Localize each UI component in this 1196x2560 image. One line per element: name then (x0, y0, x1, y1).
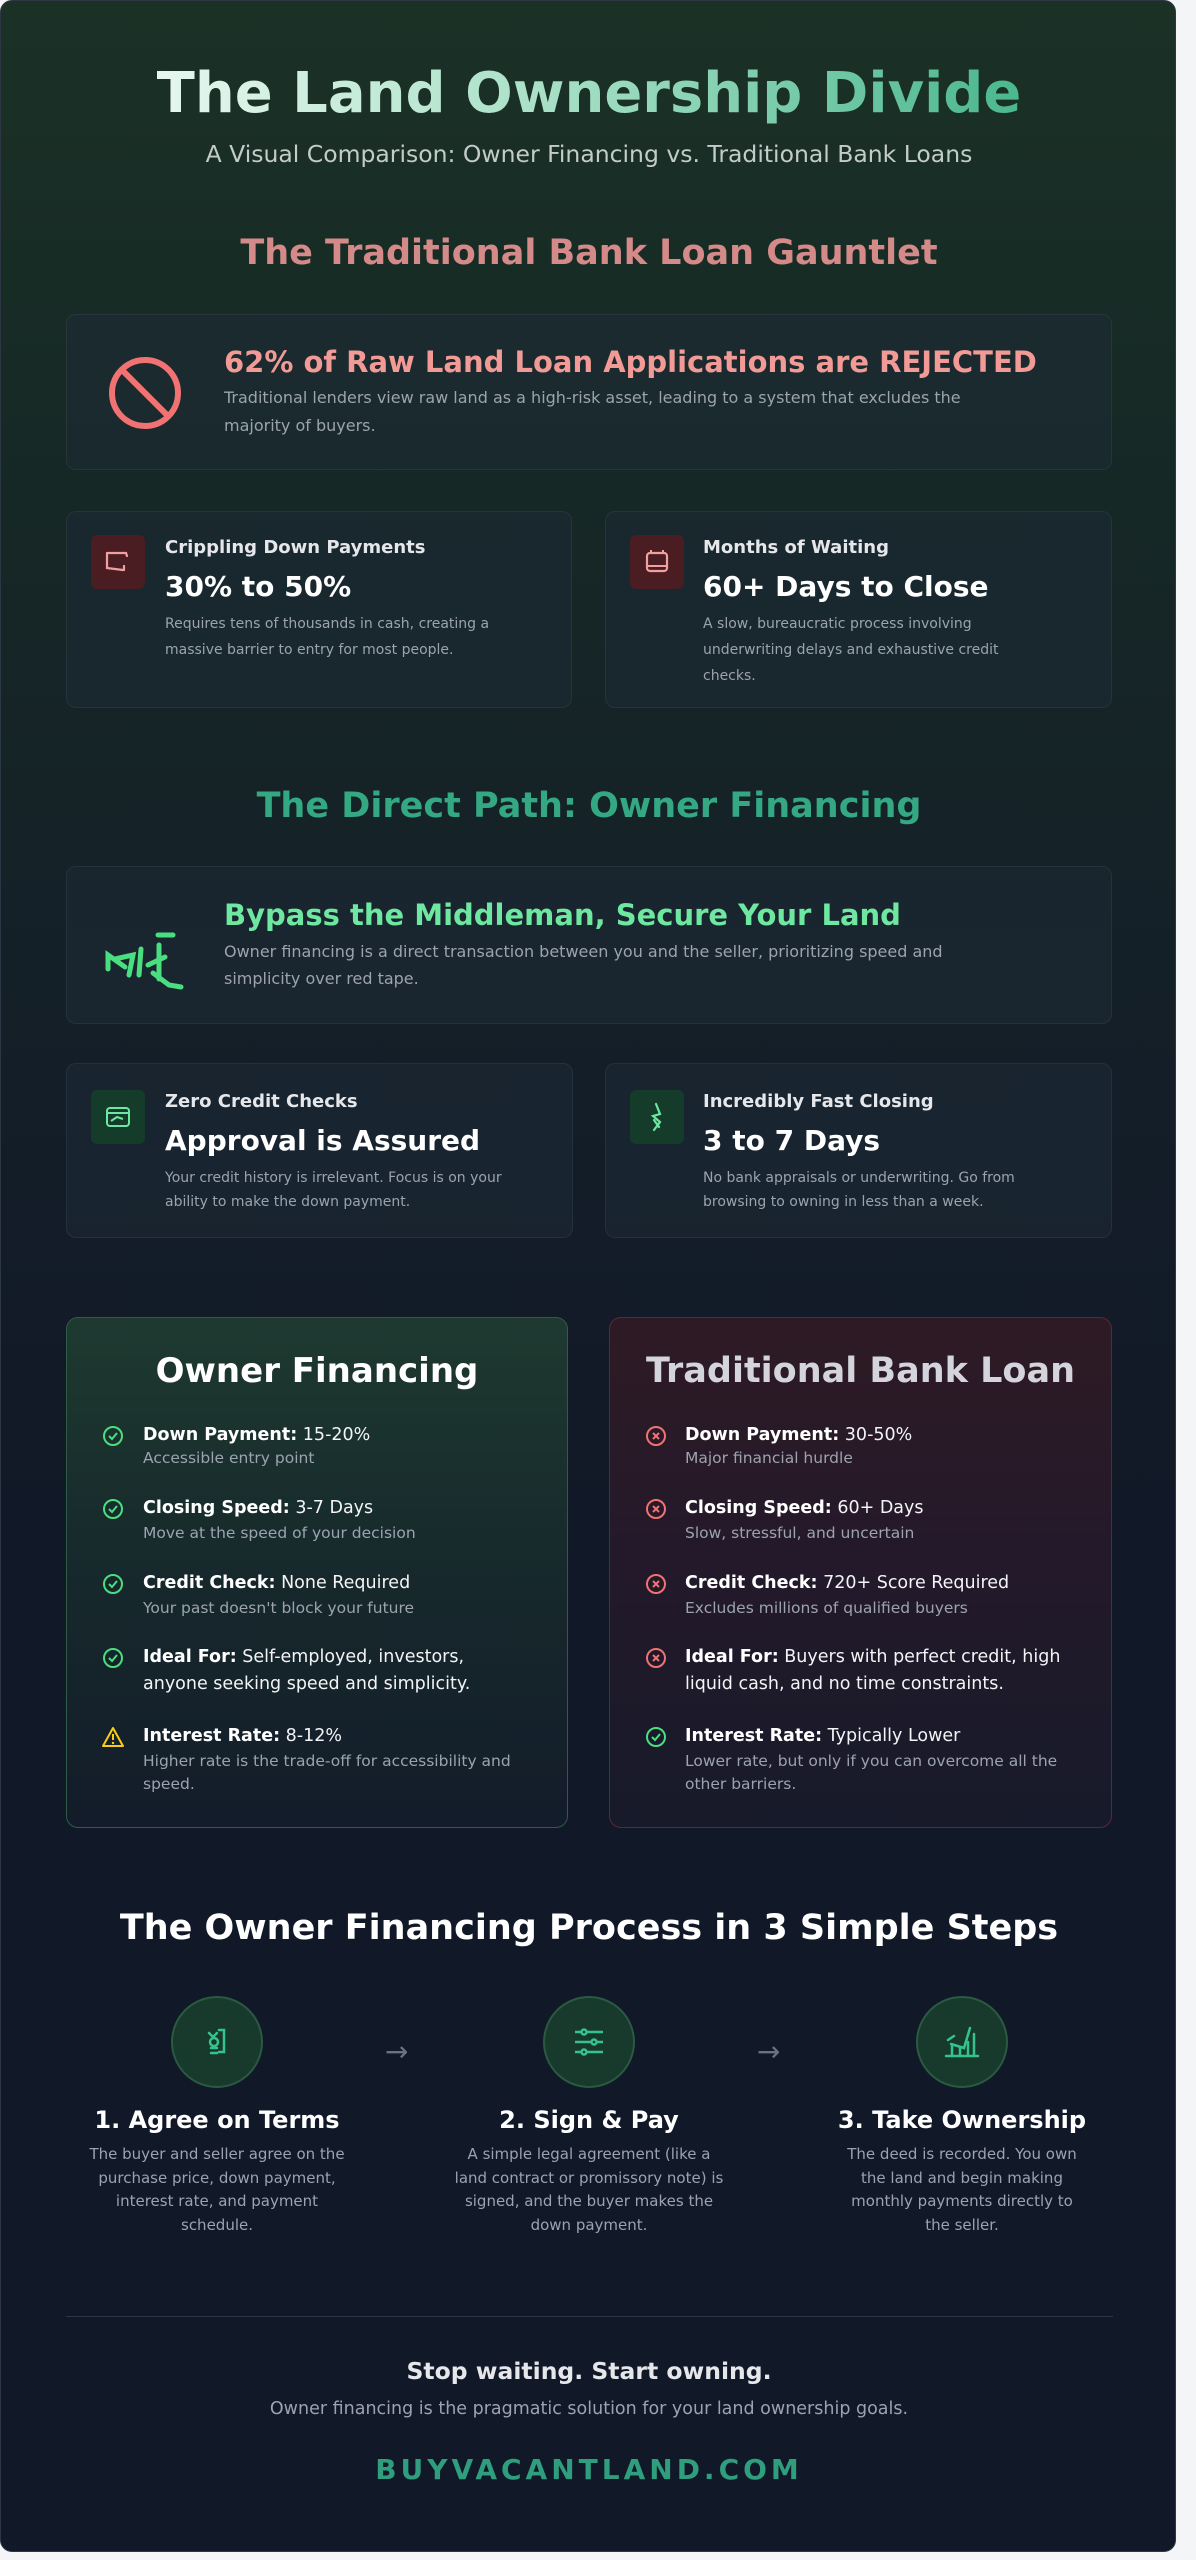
step 2: 2. Sign & Pay (499, 2106, 679, 2134)
step 1: 1. Agree on Terms (94, 2106, 340, 2134)
item: interest rate (646, 1726, 1057, 1793)
icon: wallet (91, 535, 145, 589)
panel: owner financing comparison: Ideal For: Self-employed, investors, anyone seeking speed and simplicity. (143, 1647, 470, 1694)
item: closing speed (103, 1498, 416, 1542)
icon: growth chart circle (916, 1996, 1008, 2088)
panel: bypass the middleman (66, 866, 1112, 1024)
panel: bank loan comparison (609, 1317, 1112, 1828)
panel: down payments (66, 511, 572, 708)
panel: down payments: Requires tens of thousands in cash, creating a massive barrier to entry for most people. (165, 616, 489, 658)
panel: zero credit checks (66, 1063, 573, 1238)
heading: process steps: The Owner Financing Process in 3 Simple Steps (120, 1908, 1058, 1948)
panel: down payments: Crippling Down Payments (165, 537, 425, 558)
panel: owner financing comparison: Accessible entry point (143, 1449, 314, 1467)
item: interest rate (102, 1726, 511, 1793)
arrow 1: → (385, 2035, 408, 2068)
panel: fast closing: 3 to 7 Days (703, 1124, 880, 1157)
panel: fast closing: No bank appraisals or underwriting. Go from browsing to owning in less than a week. (703, 1170, 1015, 1210)
icon: handshake (106, 932, 184, 990)
panel: down payments: 30% to 50% (165, 570, 351, 603)
panel: zero credit checks: Zero Credit Checks (165, 1091, 358, 1112)
bypass text: Owner financing is a direct transaction between you and the seller, prioritizing speed and simplicity over red tape. (224, 942, 943, 988)
heading: direct path: The Direct Path: Owner Financing (257, 786, 921, 826)
rejection heading: 62% of Raw Land Loan Applications are REJECTED (224, 345, 1037, 379)
panel: bank loan comparison: Lower rate, but only if you can overcome all the other barriers. (685, 1752, 1057, 1793)
column heading: Traditional Bank Loan (646, 1351, 1075, 1391)
item: closing speed (646, 1498, 924, 1542)
icon: credit card (91, 1090, 145, 1144)
step 2: A simple legal agreement (like a land contract or promissory note) is signed, and the buyer makes the down payment. (455, 2145, 723, 2234)
column heading: Owner Financing (156, 1351, 478, 1391)
step 2 (455, 1996, 723, 2234)
step 1 (89, 1996, 345, 2234)
heading: bank loan gauntlet: The Traditional Bank Loan Gauntlet (240, 233, 938, 273)
icon: handshake circle (171, 1996, 263, 2088)
panel: bank loan comparison: Ideal For: Buyers with perfect credit, high liquid cash, and no time constraints. (685, 1647, 1060, 1694)
panel: owner financing comparison: Interest Rate: 8-12% (143, 1726, 342, 1746)
arrow 2: → (757, 2035, 780, 2068)
panel: zero credit checks: Approval is Assured (165, 1124, 480, 1157)
panel: owner financing comparison: Credit Check: None Required (143, 1573, 410, 1593)
panel: bank loan comparison: Excludes millions of qualified buyers (685, 1599, 968, 1617)
panel: bank loan comparison: Down Payment: 30-50% (685, 1425, 912, 1445)
panel: zero credit checks: Your credit history is irrelevant. Focus is on your ability to make the down payment. (165, 1170, 502, 1210)
subtitle: A Visual Comparison: Owner Financing vs. Traditional Bank Loans (206, 140, 972, 168)
icon: lightning (630, 1090, 684, 1144)
panel: months of waiting: 60+ Days to Close (703, 570, 989, 603)
panel: bank loan comparison: Credit Check: 720+ Score Required (685, 1573, 1009, 1593)
icon: prohibited (109, 357, 181, 429)
panel: owner financing comparison: Closing Speed: 3-7 Days (143, 1498, 373, 1518)
panel: owner financing comparison: Move at the speed of your decision (143, 1524, 416, 1542)
step 3 (838, 1996, 1086, 2234)
panel: months of waiting: A slow, bureaucratic process involving underwriting delays and exhaustive credit checks. (703, 616, 998, 684)
panel: bank loan comparison: Interest Rate: Typically Lower (685, 1726, 960, 1746)
step 1: The buyer and seller agree on the purchase price, down payment, interest rate, and payment schedule. (89, 2145, 345, 2234)
title: The Land Ownership Divide (157, 61, 1021, 126)
panel: months of waiting (605, 511, 1112, 708)
panel: bank loan comparison: Slow, stressful, and uncertain (685, 1524, 914, 1542)
rejection text: Traditional lenders view raw land as a high-risk asset, leading to a system that excludes the majority of buyers. (224, 388, 961, 435)
panel: rejection stat (66, 314, 1112, 470)
item: credit check (646, 1573, 1009, 1617)
icon: calendar (630, 535, 684, 589)
panel: owner financing comparison: Down Payment: 15-20% (143, 1425, 370, 1445)
panel: owner financing comparison: Your past doesn't block your future (143, 1599, 414, 1617)
step 3: The deed is recorded. You own the land and begin making monthly payments directly to the seller. (847, 2145, 1077, 2234)
item: down payment (646, 1425, 912, 1467)
footer text: Owner financing is the pragmatic solution for your land ownership goals. (270, 2399, 908, 2419)
panel: bank loan comparison: Closing Speed: 60+ Days (685, 1498, 924, 1518)
item: down payment (103, 1425, 370, 1467)
bypass heading: Bypass the Middleman, Secure Your Land (224, 898, 901, 932)
item: ideal for (103, 1647, 470, 1694)
footer tagline: Stop waiting. Start owning. (406, 2357, 772, 2385)
icon: sliders circle (543, 1996, 635, 2088)
panel: bank loan comparison: Major financial hurdle (685, 1449, 853, 1467)
item: credit check (103, 1573, 414, 1617)
panel: owner financing comparison: Higher rate is the trade-off for accessibility and speed. (143, 1752, 511, 1793)
brand: BUYVACANTLAND.COM (375, 2453, 803, 2486)
panel: fast closing (605, 1063, 1112, 1238)
step 3: 3. Take Ownership (838, 2106, 1086, 2134)
item: ideal for (646, 1647, 1060, 1694)
panel: fast closing: Incredibly Fast Closing (703, 1091, 934, 1112)
panel: months of waiting: Months of Waiting (703, 537, 889, 558)
panel: owner financing comparison (66, 1317, 568, 1828)
